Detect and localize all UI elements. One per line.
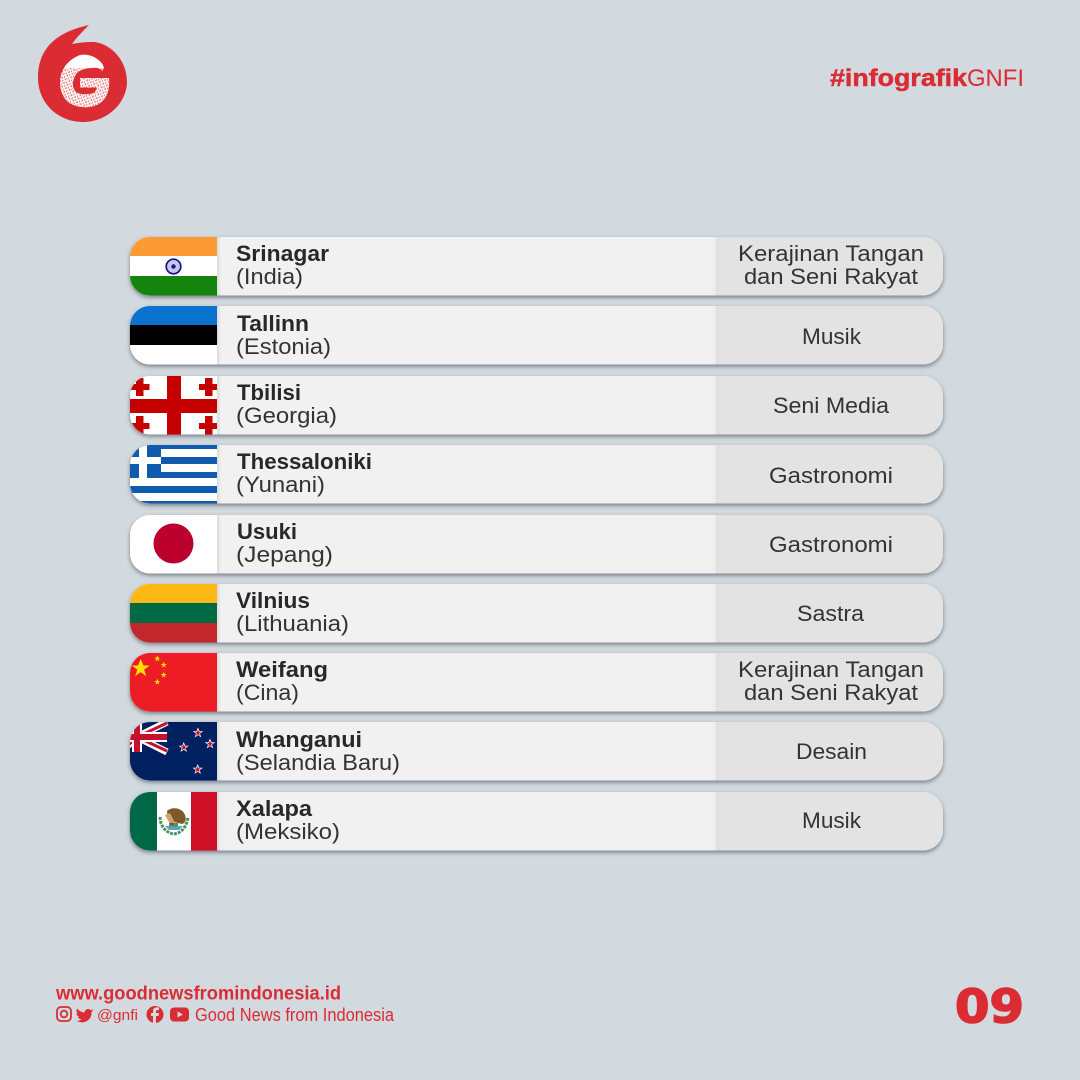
row: Tbilisi: (Georgia): [236, 403, 337, 428]
label: Srinagar: Srinagar: [236, 241, 329, 266]
category: Kerajinan Tangan dan Seni Rakyat: dan Seni Rakyat: [744, 680, 918, 705]
category: Gastronomi: Gastronomi: [769, 532, 893, 557]
category: Gastronomi: Gastronomi: [769, 463, 893, 488]
row: Thessaloniki: [130, 445, 943, 504]
row: Tallinn: (Estonia): [236, 334, 331, 359]
hashtag title: #infografik: [830, 65, 968, 92]
label: Whanganui: Whanganui: [236, 727, 362, 752]
row: Vilnius: (Lithuania): [236, 611, 349, 636]
row: Srinagar: [130, 237, 943, 296]
label: Vilnius: Vilnius: [236, 588, 310, 613]
row: Weifang: [130, 653, 943, 712]
category: Kerajinan Tangan dan Seni Rakyat: [738, 657, 924, 705]
label: Tallinn: Tallinn: [237, 311, 309, 336]
flag: India: [130, 237, 217, 296]
category: Kerajinan Tangan dan Seni Rakyat: Kerajinan Tangan: [738, 657, 924, 682]
flag: Mexico: [130, 792, 217, 851]
row: Usuki: [130, 515, 943, 574]
category: Sastra: Sastra: [797, 601, 865, 626]
page number: 09: [955, 980, 1024, 1034]
category: Seni Media: Seni Media: [773, 393, 890, 418]
row: Whanganui: (Selandia Baru): [236, 750, 400, 775]
channel name: Good News from Indonesia: [195, 1005, 395, 1025]
label: Thessaloniki: Thessaloniki: [237, 449, 372, 474]
flag: Japan: [130, 515, 217, 574]
flag: Estonia: [130, 306, 217, 365]
row: Vilnius: [130, 584, 943, 643]
hashtag title: [830, 65, 1024, 92]
flag: New Zealand: [124, 722, 217, 781]
category: Musik: Musik: [802, 808, 862, 833]
label: Weifang: Weifang: [236, 657, 328, 682]
label: Tbilisi: Tbilisi: [237, 380, 301, 405]
category: Kerajinan Tangan dan Seni Rakyat: dan Seni Rakyat: [744, 264, 918, 289]
icon: facebook: [146, 1006, 164, 1023]
category: Kerajinan Tangan dan Seni Rakyat: [738, 241, 924, 289]
row: Whanganui: [124, 722, 943, 781]
icon: youtube: [170, 1008, 189, 1022]
category: Musik: Musik: [802, 324, 862, 349]
row: Tbilisi: [130, 376, 943, 435]
row: Tallinn: [130, 306, 943, 365]
icon: twitter: [76, 1008, 93, 1022]
flag: Lithuania: [130, 584, 217, 643]
flag: Greece: [130, 445, 217, 504]
label: Xalapa: Xalapa: [236, 796, 313, 821]
row: Weifang: (Cina): [236, 680, 299, 705]
footer: social links: [57, 1005, 395, 1025]
flag: China: [130, 653, 217, 712]
footer: website: www.goodnewsfromindonesia.id: [55, 984, 341, 1004]
label: Usuki: Usuki: [237, 519, 297, 544]
row: Usuki: (Jepang): [236, 542, 333, 567]
hashtag title: GNFI: [967, 65, 1024, 92]
flag: Georgia: [130, 376, 218, 435]
row: Thessaloniki: (Yunani): [236, 472, 325, 497]
row: Srinagar: (India): [236, 264, 303, 289]
category: Kerajinan Tangan dan Seni Rakyat: Kerajinan Tangan: [738, 241, 924, 266]
category: Desain: Desain: [796, 739, 867, 764]
icon: instagram: [57, 1007, 71, 1021]
row: Xalapa: [130, 792, 943, 851]
handle: @gnfi: [97, 1007, 138, 1024]
logo: GNFI garuda: [38, 25, 127, 122]
row: Xalapa: (Meksiko): [236, 819, 340, 844]
